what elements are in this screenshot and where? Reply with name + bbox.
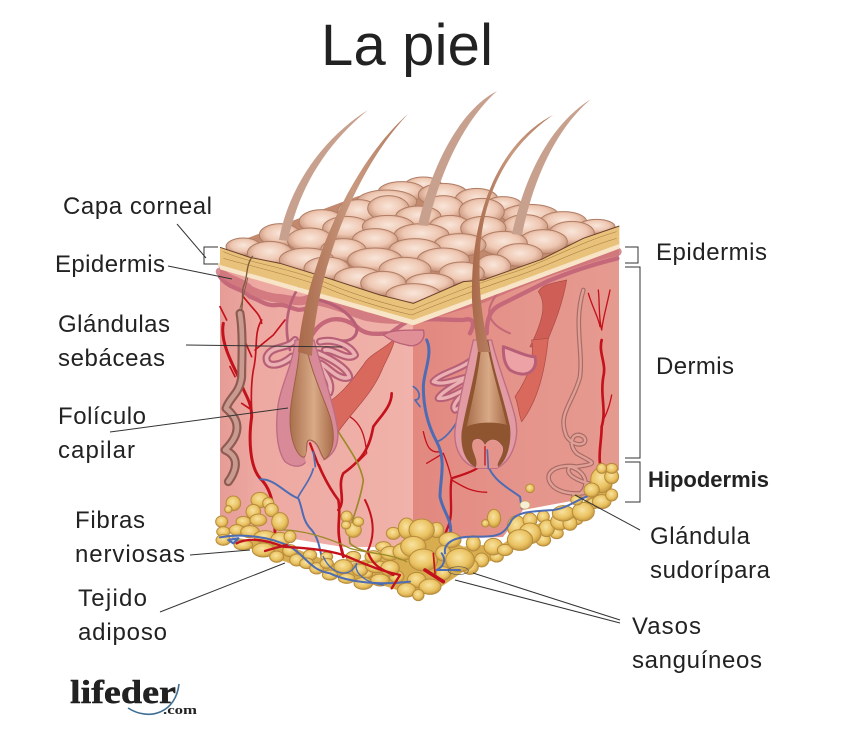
- label: sudoripara: sudorípara: [650, 557, 771, 584]
- logo wordmark: lifeder: [70, 675, 176, 711]
- muscle right upper: [530, 280, 567, 350]
- label: adiposo: adiposo: [78, 619, 167, 646]
- muscle right lower: [515, 338, 548, 422]
- label: epidermis right: Epidermis: [656, 239, 767, 266]
- adipose tissue: [216, 463, 619, 601]
- label: glandulas: Glándulas: [58, 311, 170, 338]
- fat layer underlay: [230, 480, 613, 597]
- hairs: [279, 91, 591, 356]
- label: hipodermis: Hipodermis: [648, 467, 769, 492]
- label: epidermis left: Epidermis: [55, 251, 165, 278]
- hair follicle right: [455, 340, 517, 468]
- panel: right dermis face: [413, 240, 619, 540]
- label: sebaceas: sebáceas: [58, 345, 165, 372]
- labels: left column: [55, 193, 212, 646]
- surface underlay: [230, 180, 615, 303]
- white fat cell highlight: [520, 501, 530, 509]
- sebaceous gland right: [433, 273, 536, 410]
- duct opening through band: [242, 256, 253, 310]
- label: capilar: capilar: [58, 437, 135, 464]
- nerve fiber: [338, 432, 407, 563]
- surface outline: [220, 226, 619, 303]
- dermal papillae band: [220, 245, 617, 338]
- hair follicle left: [277, 340, 338, 468]
- vessels running through fat: [220, 497, 587, 588]
- hair 3: [418, 91, 497, 226]
- vessels: blue network: [260, 340, 522, 567]
- hair 4: [472, 115, 553, 352]
- sebaceous gland left: [267, 273, 424, 393]
- stratum corneum yellow band: [220, 226, 619, 320]
- logo: lifeder.com: [70, 675, 197, 717]
- sweat duct left: [225, 260, 253, 482]
- label: nerviosas: nerviosas: [75, 541, 185, 568]
- vessels: right red network: [423, 290, 612, 570]
- hair 1: [279, 110, 368, 241]
- top surface and epidermis band: [220, 177, 619, 325]
- label: vasos: Vasos: [632, 613, 701, 640]
- hair 2: [298, 114, 408, 356]
- scale cells: [226, 177, 615, 306]
- label: glandula: Glándula: [650, 523, 751, 550]
- muscle left: [327, 338, 395, 432]
- label: foliculo: Folículo: [58, 403, 146, 430]
- logo arc: [128, 684, 179, 714]
- label: tejido: Tejido: [78, 585, 147, 612]
- label: fibras: Fibras: [75, 507, 145, 534]
- label: dermis: Dermis: [656, 353, 734, 380]
- hair 5: [512, 99, 591, 235]
- logo domain: .com: [163, 702, 197, 717]
- cream band edge: [220, 244, 619, 325]
- label: capa corneal: Capa corneal: [63, 193, 212, 220]
- band strata lines: [223, 232, 617, 315]
- label: sanguineos: sanguíneos: [632, 647, 762, 674]
- callout leader lines: [110, 224, 640, 623]
- panel: left dermis face: [220, 262, 413, 547]
- skin cross-section illustration: [216, 91, 619, 601]
- vessels from follicle bulbs: [310, 443, 488, 468]
- labels: right column: [632, 239, 771, 674]
- title: La piel: [321, 13, 493, 78]
- infographic canvas: [56, 22, 770, 716]
- sweat gland right: [549, 290, 607, 495]
- vessels: left red network: [220, 297, 392, 553]
- detail layer in magnified coordinates: [216, 245, 619, 601]
